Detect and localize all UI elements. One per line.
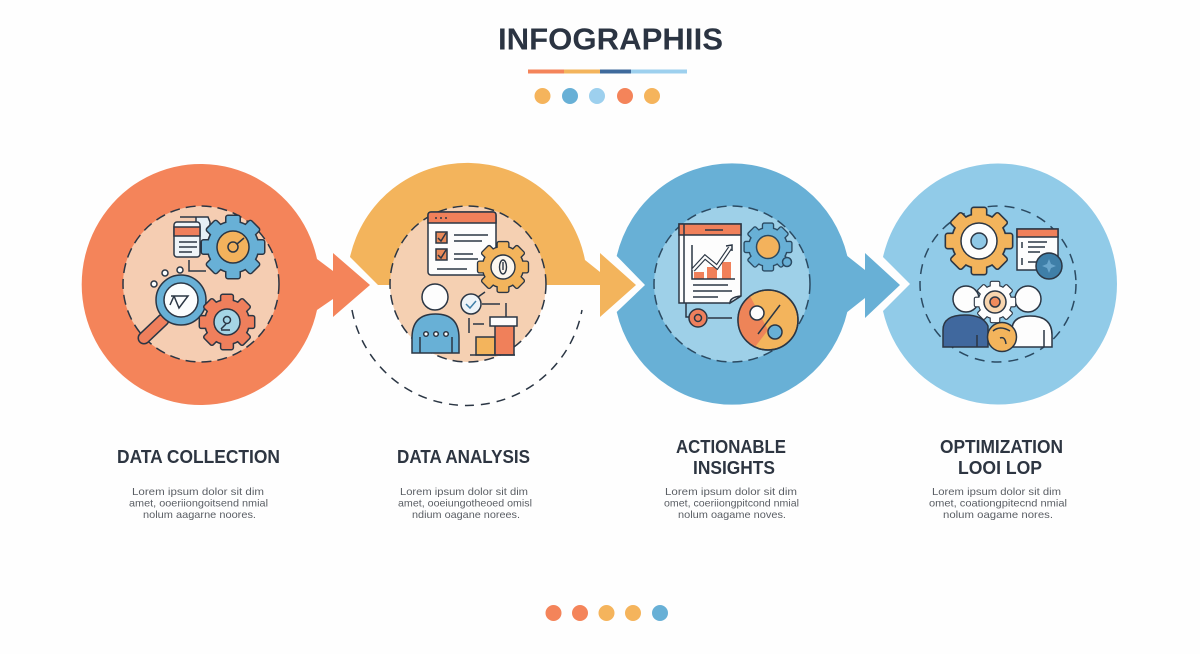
- heading: actionable insights: ACTIONABLE: [676, 437, 786, 457]
- icon: checklist window: [428, 212, 496, 275]
- blue circle with arrow: [617, 163, 900, 405]
- icon: document: [174, 217, 210, 271]
- title: INFOGRAPHIIS: [498, 22, 723, 56]
- text block: optimization loop: nolum oagame nores.: [943, 509, 1053, 521]
- icon: report document: [679, 224, 741, 327]
- text block: data collection: [129, 486, 268, 521]
- text block: optimization loop: [929, 486, 1067, 521]
- top dots: [534, 88, 660, 104]
- icon: blue gear: [745, 224, 791, 270]
- heading: data collection: DATA COLLECTION: [117, 447, 280, 467]
- icon: yellow gear: [478, 242, 528, 292]
- heading: data analysis: DATA ANALYSIS: [397, 447, 530, 467]
- text block: actionable insights: omet, coeriiongpitcond nmial: [664, 498, 799, 510]
- yellow half circle with arrow: [350, 163, 636, 317]
- icon: percent coin: [738, 290, 798, 350]
- bottom dots: [546, 605, 668, 621]
- text block: data analysis: [398, 486, 532, 521]
- heading: optimization loop: [940, 437, 1063, 478]
- text block: data collection: nolum aagarne noores.: [143, 509, 256, 521]
- panel: data analysis: [350, 163, 636, 405]
- dashed inner circle: [123, 206, 279, 362]
- text block: actionable insights: [664, 486, 799, 521]
- heading: actionable insights: [676, 437, 786, 478]
- dashed inner circle: [654, 206, 810, 362]
- text block: data collection: Lorem ipsum dolor sit dim: [132, 486, 264, 498]
- text block: data collection: amet, ooeriiongoitsend nmial: [129, 498, 268, 510]
- panel: actionable insights: [617, 163, 900, 405]
- dashed inner circle: [920, 206, 1076, 362]
- light blue circle: [883, 164, 1117, 405]
- icon: window with badge: [1017, 229, 1062, 279]
- dashed outer arc: [352, 310, 582, 405]
- text block: data analysis: Lorem ipsum dolor sit dim: [400, 486, 528, 498]
- icon: magnifier: [144, 267, 206, 338]
- icon: check badge and bars: [461, 292, 517, 355]
- text block: data analysis: ndium oagane norees.: [412, 509, 520, 521]
- heading: actionable insights: INSIGHTS: [693, 458, 775, 478]
- heading: optimization loop: OPTIMIZATION: [940, 437, 1063, 457]
- heading: optimization loop: LOOI LOP: [958, 458, 1042, 478]
- icon: team: [943, 282, 1052, 352]
- text block: actionable insights: nolum oagame noves.: [678, 509, 786, 521]
- dashed inner circle: [390, 206, 546, 362]
- panel: optimization loop: [883, 164, 1117, 405]
- title underline: [528, 70, 687, 74]
- icon: large yellow gear: [946, 208, 1012, 274]
- text block: actionable insights: Lorem ipsum dolor sit dim: [665, 486, 797, 498]
- text block: optimization loop: Lorem ipsum dolor sit dim: [932, 486, 1061, 498]
- icon: blue gear: [202, 216, 264, 278]
- panel: data collection: [82, 164, 370, 405]
- orange circle with arrow: [82, 164, 370, 405]
- icon: person: [412, 284, 459, 353]
- text block: data analysis: amet, ooeiungotheoed omisl: [398, 498, 532, 510]
- text block: optimization loop: omet, coationgpitecnd nmial: [929, 498, 1067, 510]
- icon: orange gear: [200, 295, 254, 349]
